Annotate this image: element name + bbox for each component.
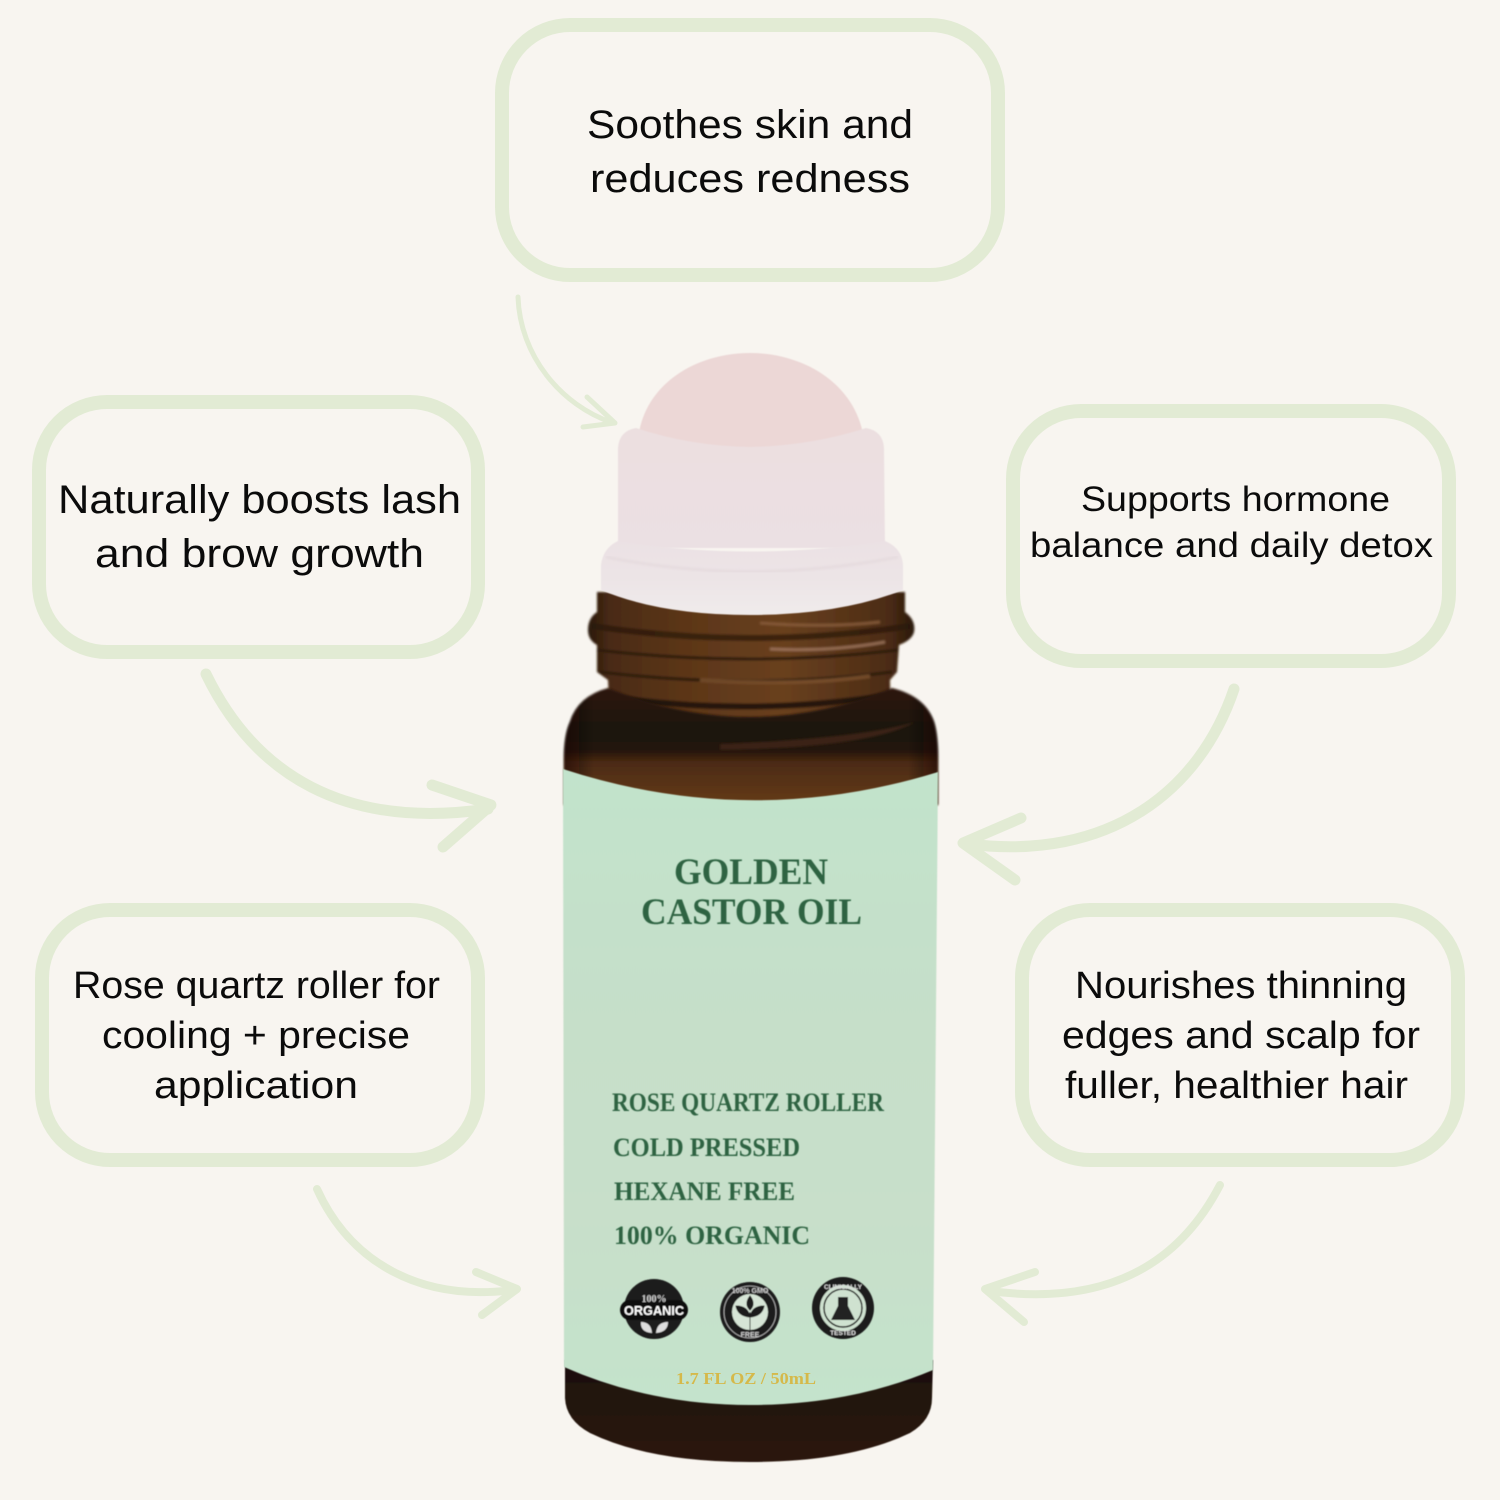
badge: clinically tested: CLINICALLY [824,1284,863,1291]
label feature list: HEXANE FREE [614,1177,795,1206]
label feature list: ROSE QUARTZ ROLLER [612,1088,884,1117]
label feature list: 100% ORGANIC [614,1221,810,1250]
label size text: 1.7 FL OZ / 50mL [676,1369,816,1388]
callout: lash and brow growth: and brow growth [95,532,424,576]
callout: rose quartz roller: cooling + precise [102,1015,410,1057]
label title: CASTOR OIL [641,892,862,933]
callout: thinning edges and scalp [1022,910,1458,1160]
badge: 100% organic [620,1279,688,1339]
callout: soothes skin [502,25,998,275]
label feature list [612,1088,884,1250]
callout: lash and brow growth: Naturally boosts lash [58,478,461,522]
bottle base [565,1360,933,1462]
badge: plant based [720,1282,780,1342]
bottle glass neck [588,592,914,722]
rose quartz roller [638,353,864,455]
badge: 100% organic: ORGANIC [624,1304,684,1318]
label title [641,852,862,933]
shoulder edge shading [564,688,938,805]
roller cap flange [601,541,903,615]
shoulder highlight [720,722,915,750]
arrow: upper right to bottle [963,689,1234,880]
arrow: lower left to bottle [317,1189,517,1315]
arrow: upper left to bottle [206,674,491,847]
callout: rose quartz roller [42,910,478,1160]
callout: thinning edges and scalp: Nourishes thinning [1075,965,1407,1007]
badge: clinically tested [812,1277,874,1339]
callout: hormone balance: balance and daily detox [1030,526,1434,565]
label [563,769,938,1405]
callout: soothes skin: reduces redness [590,157,910,201]
arrow: top callout to roller [518,297,615,427]
bottle shoulder [564,688,938,805]
callout: soothes skin: Soothes skin and [587,103,913,147]
callout: hormone balance: Supports hormone [1081,480,1390,519]
label title: GOLDEN [674,852,828,893]
callout: thinning edges and scalp: fuller, healthier hair [1065,1065,1408,1107]
badge: clinically tested: TESTED [830,1330,856,1337]
label feature list: COLD PRESSED [613,1133,800,1162]
badge: plant based: FREE [741,1332,760,1339]
callout: rose quartz roller: application [154,1065,358,1107]
badge: 100% organic: 100% [642,1294,666,1305]
flange ledge shading [606,557,898,572]
roller cap [618,428,885,548]
callout: thinning edges and scalp: edges and scalp for [1062,1015,1420,1057]
bottle [563,353,938,1462]
callout: rose quartz roller: Rose quartz roller for [73,965,440,1007]
badge: plant based: 100% GMO [732,1288,769,1295]
arrow: lower right to bottle [985,1185,1220,1322]
callout: lash and brow growth [39,402,478,652]
callout: hormone balance [1013,411,1449,661]
